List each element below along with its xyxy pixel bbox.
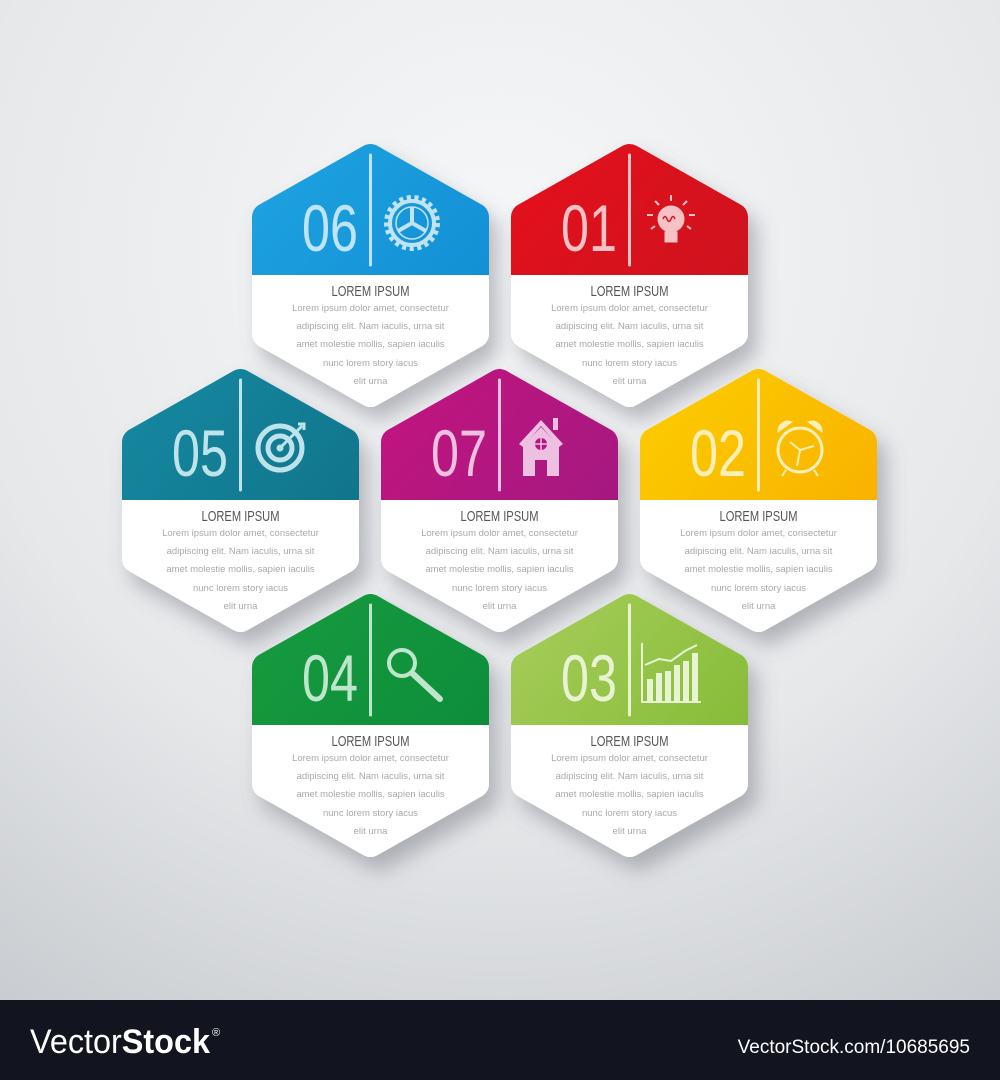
body text: elit urna [354,376,388,387]
body text: adipiscing elit. Nam iaculis, urna sit [685,546,833,557]
hex 03 [525,605,734,843]
body text: Lorem ipsum dolor amet, consectetur [421,528,578,539]
body text: Lorem ipsum dolor amet, consectetur [551,753,708,764]
title: LOREM IPSUM [202,508,280,525]
title: LOREM IPSUM [332,733,410,750]
icon: bar chart [641,643,701,703]
icon: alarm clock [778,421,822,476]
body text: adipiscing elit. Nam iaculis, urna sit [556,321,704,332]
title: LOREM IPSUM [332,283,410,300]
body text [292,303,449,387]
body text [551,303,708,387]
icon: light bulb [647,195,695,242]
body text: nunc lorem story iacus [582,808,677,819]
footer logo: VectorStock [30,1023,210,1061]
body text: adipiscing elit. Nam iaculis, urna sit [167,546,315,557]
hex 01 [525,155,734,393]
body text: adipiscing elit. Nam iaculis, urna sit [556,771,704,782]
body text: elit urna [613,826,647,837]
body text [162,528,319,612]
body text [551,753,708,837]
body text: nunc lorem story iacus [193,583,288,594]
number 03: 03 [561,641,617,715]
body text: amet molestie mollis, sapien iaculis [684,564,833,575]
body text: amet molestie mollis, sapien iaculis [555,339,704,350]
body text: amet molestie mollis, sapien iaculis [166,564,315,575]
body text: adipiscing elit. Nam iaculis, urna sit [297,771,445,782]
body text: nunc lorem story iacus [323,358,418,369]
body text: elit urna [354,826,388,837]
body text: elit urna [483,601,517,612]
body text: amet molestie mollis, sapien iaculis [425,564,574,575]
body text: nunc lorem story iacus [582,358,677,369]
body text: amet molestie mollis, sapien iaculis [296,339,445,350]
hex 04 [266,605,475,843]
body text: amet molestie mollis, sapien iaculis [296,789,445,800]
number 01: 01 [561,191,617,265]
title: LOREM IPSUM [460,508,538,525]
body text: nunc lorem story iacus [323,808,418,819]
body text: Lorem ipsum dolor amet, consectetur [162,528,319,539]
body text: nunc lorem story iacus [452,583,547,594]
body text: elit urna [742,601,776,612]
hex 07 [395,380,604,618]
footer bar: ® [212,1027,220,1039]
body text: Lorem ipsum dolor amet, consectetur [680,528,837,539]
body text: nunc lorem story iacus [711,583,806,594]
number 02: 02 [690,416,746,490]
body text: Lorem ipsum dolor amet, consectetur [292,753,449,764]
body text: amet molestie mollis, sapien iaculis [555,789,704,800]
body text: adipiscing elit. Nam iaculis, urna sit [426,546,574,557]
hex 06 [266,155,475,393]
body text [292,753,449,837]
hex 05 [136,380,345,618]
footer url: VectorStock.com/10685695 [738,1037,970,1058]
title: LOREM IPSUM [590,283,668,300]
body text: elit urna [613,376,647,387]
title: LOREM IPSUM [720,508,798,525]
number 04: 04 [302,641,358,715]
number 07: 07 [431,416,487,490]
icon: magnifier [389,650,440,699]
footer bar [0,1000,1000,1080]
body text [680,528,837,612]
hex 02 [654,380,863,618]
body text: Lorem ipsum dolor amet, consectetur [292,303,449,314]
body text: elit urna [224,601,258,612]
icon: target [258,424,304,470]
title: LOREM IPSUM [590,733,668,750]
number 06: 06 [302,191,358,265]
number 05: 05 [172,416,228,490]
icon: gear [387,198,437,248]
body text [421,528,578,612]
body text: Lorem ipsum dolor amet, consectetur [551,303,708,314]
body text: adipiscing elit. Nam iaculis, urna sit [297,321,445,332]
icon: house [519,418,563,476]
